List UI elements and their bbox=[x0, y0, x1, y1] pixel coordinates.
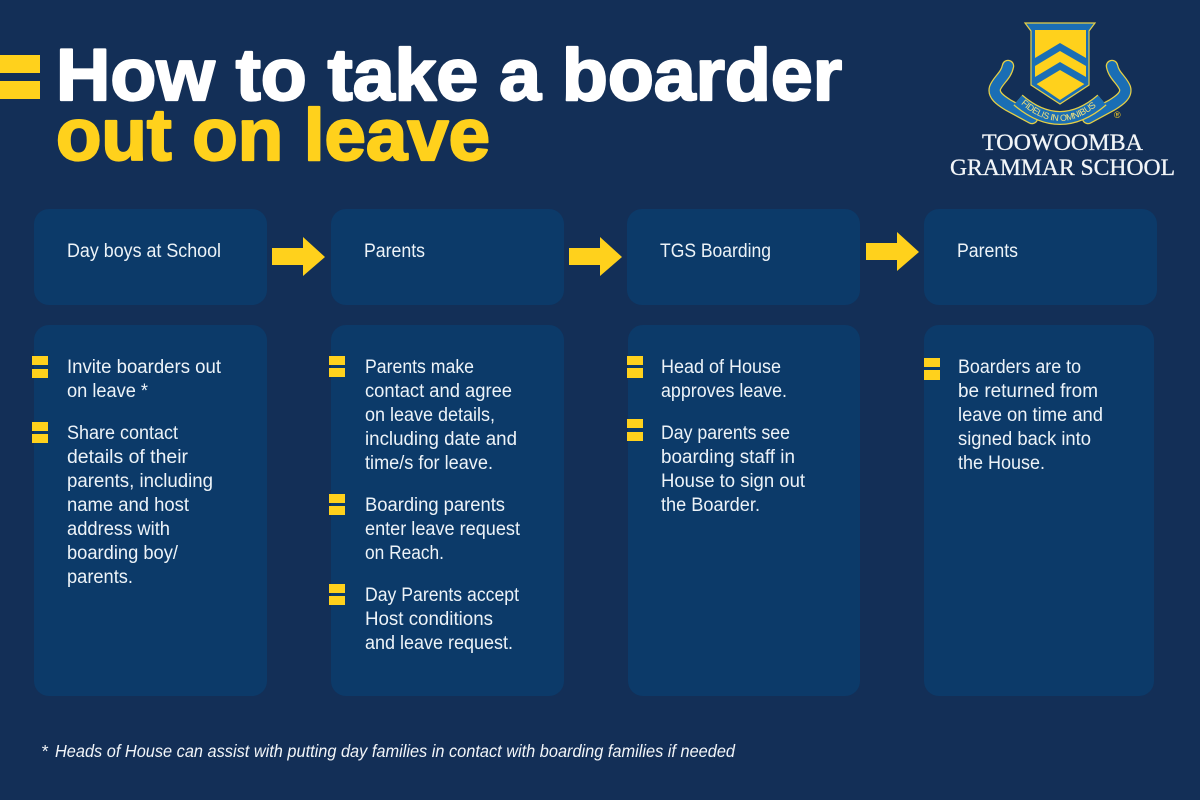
logo: Toowoomba Grammar School crest and wordmark: FIDELIS IN OMNIBUS bbox=[1022, 100, 1096, 121]
header panel: Parents bbox=[331, 209, 564, 305]
step text bbox=[958, 357, 1103, 474]
step text bbox=[365, 357, 517, 474]
icon: ribbon scroll bbox=[995, 66, 1125, 118]
step text: Share contact bbox=[67, 423, 179, 444]
step text: name and host bbox=[67, 495, 190, 516]
bullet bbox=[329, 356, 345, 377]
step text: the Boarder. bbox=[661, 495, 760, 516]
step text: time/s for leave. bbox=[365, 453, 493, 474]
arrow 3 bbox=[866, 232, 919, 271]
bullet bbox=[627, 356, 643, 378]
header panel: Day boys at School: Day boys at School bbox=[67, 241, 221, 262]
bullet bbox=[32, 422, 48, 443]
panel: parents return steps bbox=[924, 325, 1154, 696]
step text: leave on time and bbox=[958, 405, 1103, 426]
step text: Day parents see bbox=[661, 423, 790, 444]
title bbox=[56, 35, 842, 176]
step text: Parents make bbox=[365, 357, 474, 378]
step text: and leave request. bbox=[365, 633, 513, 654]
step text: be returned from bbox=[958, 381, 1098, 402]
panel: day boys steps bbox=[32, 325, 267, 696]
step text: contact and agree bbox=[365, 381, 512, 402]
bullet bbox=[627, 419, 643, 441]
step text: signed back into bbox=[958, 429, 1091, 450]
step text: including date and bbox=[365, 429, 517, 450]
bullet bbox=[329, 494, 345, 515]
step text: parents. bbox=[67, 567, 133, 588]
step text: Head of House bbox=[661, 357, 781, 378]
step text: parents, including bbox=[67, 471, 213, 492]
title bullet icon bbox=[0, 55, 40, 99]
step text bbox=[67, 357, 222, 402]
step text: Boarding parents bbox=[365, 495, 505, 516]
step text: Day Parents accept bbox=[365, 585, 520, 606]
step text bbox=[67, 423, 213, 588]
step text: on Reach. bbox=[365, 543, 444, 564]
bullet bbox=[329, 584, 345, 605]
step text: the House. bbox=[958, 453, 1045, 474]
step text: boarding boy/ bbox=[67, 543, 179, 564]
step text: on leave details, bbox=[365, 405, 495, 426]
motto bbox=[1020, 103, 1100, 121]
title: out on leave bbox=[56, 95, 490, 176]
step text: details of their bbox=[67, 447, 189, 468]
header panel: Parents: Parents bbox=[364, 241, 425, 262]
wordmark: GRAMMAR SCHOOL bbox=[950, 155, 1175, 180]
icon: shield bbox=[1025, 23, 1095, 104]
step text bbox=[661, 423, 806, 516]
panel: TGS boarding steps bbox=[627, 325, 860, 696]
step text: boarding staff in bbox=[661, 447, 795, 468]
step text: Invite boarders out bbox=[67, 357, 222, 378]
arrow 2 bbox=[569, 237, 622, 276]
bullet bbox=[32, 356, 48, 378]
step text: approves leave. bbox=[661, 381, 787, 402]
header panel: Day boys at School bbox=[34, 209, 267, 305]
step text: Host conditions bbox=[365, 609, 493, 630]
step text: House to sign out bbox=[661, 471, 806, 492]
header panel: Parents (return): Parents bbox=[957, 241, 1018, 262]
title: How to take a boarder bbox=[56, 35, 842, 116]
footnote: * bbox=[41, 741, 49, 761]
bullet bbox=[924, 358, 940, 380]
header panel: TGS Boarding: TGS Boarding bbox=[660, 241, 771, 262]
header panel: TGS Boarding bbox=[627, 209, 860, 305]
step text: enter leave request bbox=[365, 519, 521, 540]
wordmark: TOOWOOMBA bbox=[982, 130, 1143, 155]
step text: on leave * bbox=[67, 381, 149, 402]
footnote: Heads of House can assist with putting day families in contact with boarding families if needed bbox=[55, 741, 736, 761]
step text: address with bbox=[67, 519, 170, 540]
header panel: Parents (return) bbox=[924, 209, 1157, 305]
registered mark: ® bbox=[1114, 110, 1121, 120]
step text: Boarders are to bbox=[958, 357, 1081, 378]
step text bbox=[661, 357, 787, 402]
step text bbox=[365, 495, 521, 564]
wordmark bbox=[950, 130, 1175, 180]
panel: parents steps bbox=[329, 325, 564, 696]
step text bbox=[365, 585, 520, 654]
arrow 1 bbox=[272, 237, 325, 276]
logo: Toowoomba Grammar School crest and wordmark bbox=[950, 22, 1175, 180]
